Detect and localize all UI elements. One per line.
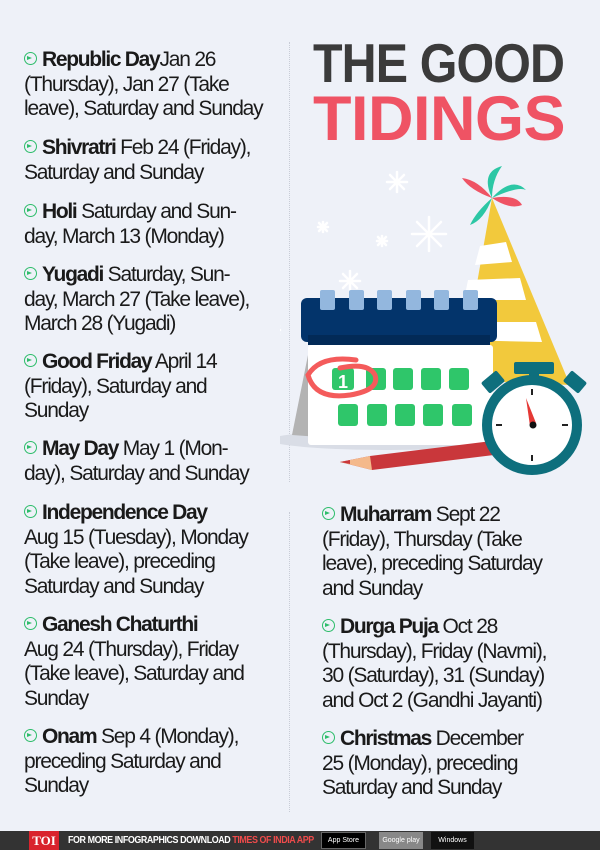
footer bar: Windows (438, 837, 467, 844)
item: Holi: Holi Saturday and Sun- (42, 200, 236, 223)
item: Independence Day: (Take leave), preceding (24, 550, 215, 573)
item: May Day: day), Saturday and Sunday (24, 462, 249, 484)
item: Republic Day (24, 48, 264, 120)
item: Republic Day: (Thursday), Jan 27 (Take (24, 72, 229, 96)
illustration: calendar, party hat, stopwatch (280, 166, 586, 475)
item: Christmas: Christmas December (340, 727, 523, 750)
item: Durga Puja (322, 615, 546, 712)
item: Holi (24, 200, 236, 248)
footer: TOI logo: TOI (32, 833, 56, 848)
item: Good Friday: (Friday), Saturday and (24, 374, 207, 398)
item: Onam: preceding Saturday and (24, 750, 221, 772)
item: Ganesh Chaturthi (24, 613, 244, 710)
item: Independence Day: Aug 15 (Tuesday), Monday (24, 526, 248, 548)
pencil (340, 440, 502, 470)
footer: TOI logo (29, 831, 59, 850)
party hat (458, 166, 570, 385)
item: Onam (24, 725, 238, 797)
item: Shivratri (24, 136, 250, 184)
calendar: 1 (338, 372, 348, 392)
calendar (270, 290, 510, 450)
item: Muharram: (Friday), Thursday (Take (322, 528, 522, 550)
item: Independence Day (24, 501, 249, 598)
item: Good Friday (24, 350, 218, 422)
item: Christmas (322, 727, 524, 799)
item: Muharram: Muharram Sept 22 (340, 503, 500, 526)
footer: download text: FOR MORE INFOGRAPHICS DOWNLOAD TIMES OF INDIA APP (68, 834, 314, 846)
item: Holi: day, March 13 (Monday) (24, 224, 224, 248)
item: Christmas: 25 (Monday), preceding (322, 752, 517, 774)
snowflakes (270, 172, 446, 335)
item: Republic Day: Republic DayJan 26 (42, 48, 215, 71)
item: Good Friday: Sunday (24, 399, 88, 422)
item: Christmas: Saturday and Sunday (322, 776, 501, 799)
item: Republic Day: leave), Saturday and Sunday (24, 97, 262, 120)
item: Muharram: leave), preceding Saturday (322, 552, 542, 575)
footer: store badges: App Store (328, 837, 359, 844)
item: Durga Puja: Durga Puja Oct 28 (340, 615, 497, 638)
title (313, 32, 565, 154)
footer bar: Google play (382, 837, 420, 844)
title: THE GOOD (313, 32, 564, 94)
item: Independence Day: Saturday and Sunday (24, 574, 203, 598)
footer bar (0, 831, 600, 850)
item: Yugadi: day, March 27 (Take leave), (24, 288, 249, 310)
item: Durga Puja: (Thursday), Friday (Navmi), (322, 640, 546, 662)
item: Yugadi: March 28 (Yugadi) (24, 312, 175, 335)
item: Durga Puja: 30 (Saturday), 31 (Sunday) (322, 664, 544, 687)
item: Muharram: and Sunday (322, 576, 422, 600)
item: May Day (24, 437, 250, 484)
item: Yugadi (24, 263, 249, 335)
stopwatch (481, 362, 587, 475)
item: Good Friday: Good Friday April 14 (42, 350, 216, 373)
item: Ganesh Chaturthi: Sunday (24, 686, 88, 710)
title: TIDINGS (313, 84, 565, 154)
item: Shivratri: Shivratri Feb 24 (Friday), (42, 136, 250, 159)
item: Ganesh Chaturthi: (Take leave), Saturday and (24, 662, 244, 685)
item: May Day: May Day May 1 (Mon- (42, 437, 227, 460)
item: Independence Day: Independence Day (42, 501, 207, 524)
footer: store badges (321, 832, 366, 849)
item: Muharram (322, 503, 543, 600)
item: Onam: Sunday (24, 774, 88, 797)
item: Ganesh Chaturthi: Aug 24 (Thursday), Friday (24, 638, 238, 660)
item: Yugadi: Yugadi Saturday, Sun- (42, 263, 229, 286)
item: Onam: Onam Sep 4 (Monday), (42, 725, 238, 748)
item: Durga Puja: and Oct 2 (Gandhi Jayanti) (322, 688, 542, 712)
item: Ganesh Chaturthi: Ganesh Chaturthi (42, 613, 197, 636)
item: Shivratri: Saturday and Sunday (24, 160, 203, 184)
